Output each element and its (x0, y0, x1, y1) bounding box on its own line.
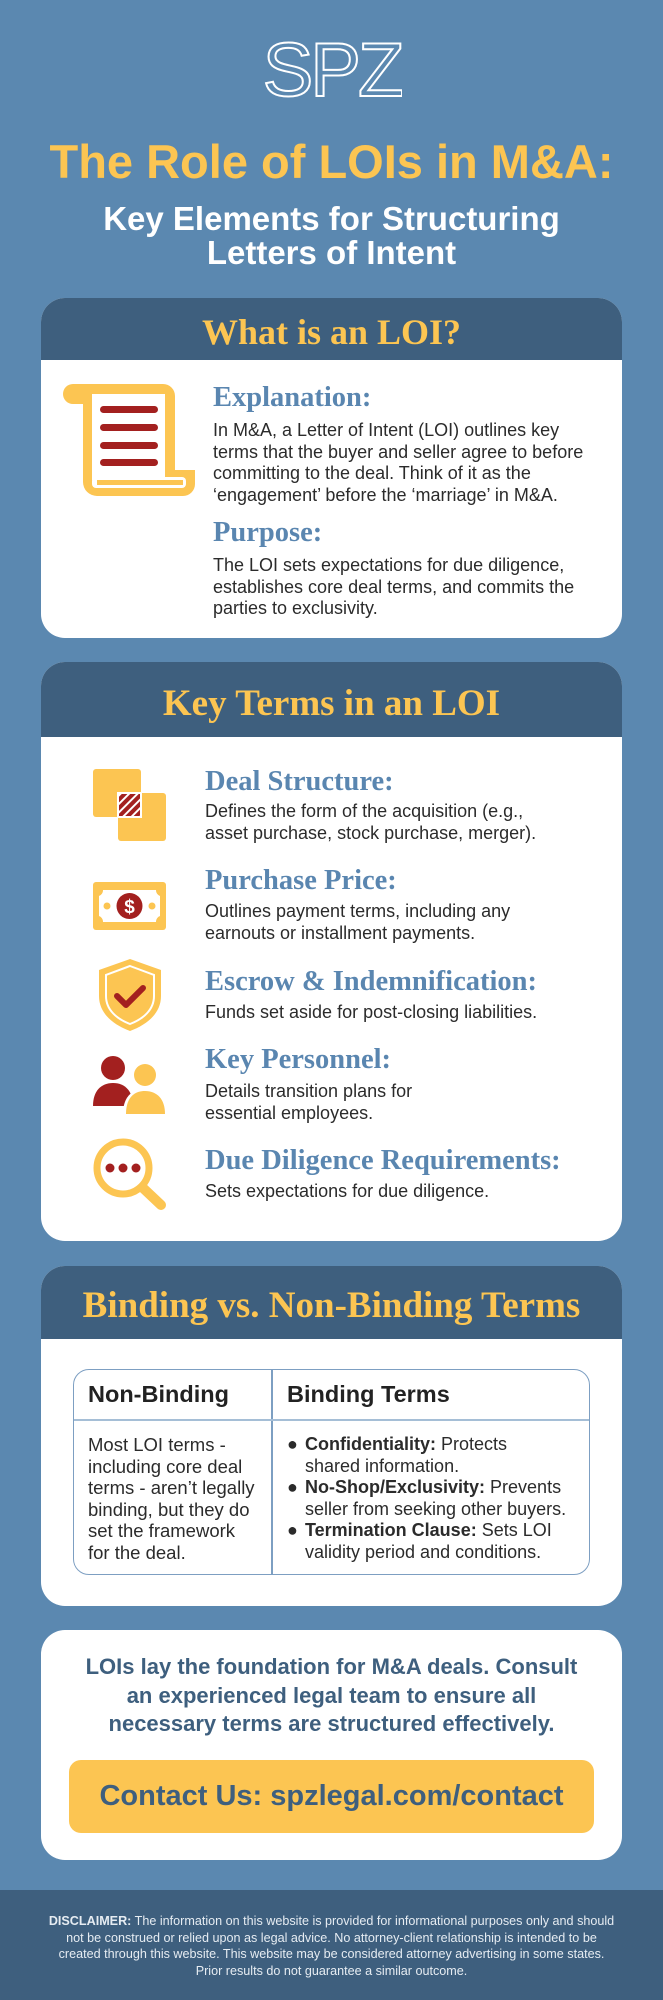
icon: people (93, 1056, 165, 1114)
text: purpose: establishes core deal terms, and commits the (213, 576, 574, 596)
footer: disclaimer: Prior results do not guarantee a similar outcome. (196, 1964, 467, 1978)
heading: Explanation: Explanation: (213, 382, 371, 413)
list: binding terms: No-Shop/Exclusivity: Prevents (305, 1477, 561, 1497)
icon: money: $ (124, 897, 135, 918)
text: non-binding: set the framework (88, 1520, 235, 1541)
text: purpose (213, 555, 574, 618)
text: non-binding (88, 1434, 255, 1562)
text: explanation (213, 420, 583, 505)
list: binding terms: Termination Clause: Sets LOI (305, 1520, 552, 1540)
text: CTA: necessary terms are structured effectively. (109, 1711, 554, 1736)
panel: Key Terms: earnouts or installment payments. (205, 922, 475, 942)
panel: Key Terms: asset purchase, stock purchase, merger). (205, 822, 536, 842)
list: binding terms: shared information. (305, 1456, 459, 1476)
text: non-binding: binding, but they do (88, 1498, 250, 1520)
button: contact (69, 1760, 594, 1833)
panel: Key Terms (41, 662, 622, 1241)
panel: What is an LOI (41, 298, 622, 638)
item: Purchase Price: Purchase Price: (205, 865, 397, 896)
icon: money (93, 882, 166, 930)
list: binding terms: ● (287, 1520, 298, 1540)
subtitle: Key Elements for Structuring (103, 200, 560, 237)
subtitle (103, 200, 560, 271)
text: CTA: LOIs lay the foundation for M&A deals. Consult (86, 1654, 577, 1679)
panel: call to action (41, 1630, 622, 1860)
list: binding terms: validity period and conditions. (305, 1542, 541, 1562)
text: non-binding: including core deal (88, 1456, 242, 1476)
item: Due Diligence: Due Diligence Requirements: (205, 1145, 561, 1176)
text: non-binding: terms - aren’t legally (88, 1477, 255, 1498)
title: The Role of LOIs in M&A: (50, 135, 613, 188)
item: Escrow: Escrow & Indemnification: (205, 966, 537, 997)
panel: Key Terms: Defines the form of the acquisition (e.g., (205, 801, 523, 821)
text: CTA: an experienced legal team to ensure all (127, 1682, 536, 1708)
footer: disclaimer: not be construed or relied upon as legal advice. No attorney-client relationship is intended to be (66, 1930, 597, 1944)
text: explanation: committing to the deal. Think of it as the (213, 463, 531, 483)
heading: Binding vs. Non-Binding Terms (41, 1266, 622, 1339)
column header: Non-Binding: Non-Binding (88, 1381, 229, 1407)
item: Key Personnel: Key Personnel: (205, 1044, 391, 1075)
table (73, 1369, 590, 1575)
heading: What is an LOI? (41, 298, 622, 360)
text: CTA (86, 1654, 578, 1736)
text: non-binding: for the deal. (88, 1542, 186, 1562)
list: binding terms: Confidentiality: Protects (305, 1434, 507, 1454)
text: purpose: The LOI sets expectations for due diligence, (213, 555, 564, 575)
panel: Key Terms: Details transition plans for (205, 1081, 412, 1101)
heading: Binding vs. Non-Binding Terms: Binding vs. Non-Binding Terms (83, 1285, 580, 1326)
panel: Key Terms: Sets expectations for due diligence. (205, 1181, 489, 1201)
heading: Key Terms in an LOI (41, 662, 622, 737)
text: explanation: terms that the buyer and seller agree to before (213, 442, 583, 462)
icon: magnifier (94, 1138, 166, 1210)
panel: Key Terms: Outlines payment terms, including any (205, 901, 510, 921)
item: Deal Structure: Deal Structure: (205, 766, 394, 797)
icon: scroll (63, 384, 195, 496)
list: binding terms (287, 1434, 566, 1562)
list: binding terms: ● (287, 1477, 298, 1497)
icon: deal structure (93, 769, 166, 841)
footer: disclaimer: DISCLAIMER: The information on this website is provided for informational purposes only and should (49, 1914, 614, 1928)
panel: Binding vs Non-Binding (41, 1266, 622, 1606)
footer: disclaimer: created through this website. This website may be considered attorney advertising in some states. (59, 1947, 604, 1961)
heading: Purpose: Purpose: (213, 517, 322, 548)
subtitle: Letters of Intent (207, 234, 456, 271)
heading: Key Terms in an LOI: Key Terms in an LOI (163, 683, 500, 724)
text: explanation: In M&A, a Letter of Intent (LOI) outlines key (213, 420, 559, 440)
heading: What is an LOI?: What is an LOI? (202, 312, 461, 352)
text: explanation: ‘engagement’ before the ‘marriage’ in M&A. (213, 484, 558, 504)
footer: disclaimer (0, 1890, 663, 2000)
button: contact: Contact Us: spzlegal.com/contact (99, 1780, 564, 1812)
list: binding terms: seller from seeking other buyers. (305, 1498, 566, 1518)
icon: shield (99, 959, 161, 1031)
panel: Key Terms: Funds set aside for post-closing liabilities. (205, 1002, 537, 1022)
panel: Key Terms: essential employees. (205, 1102, 373, 1122)
column header: Binding Terms: Binding Terms (287, 1381, 450, 1407)
text: purpose: parties to exclusivity. (213, 598, 378, 618)
text: non-binding: Most LOI terms - (88, 1434, 226, 1455)
list: binding terms: ● (287, 1434, 298, 1454)
